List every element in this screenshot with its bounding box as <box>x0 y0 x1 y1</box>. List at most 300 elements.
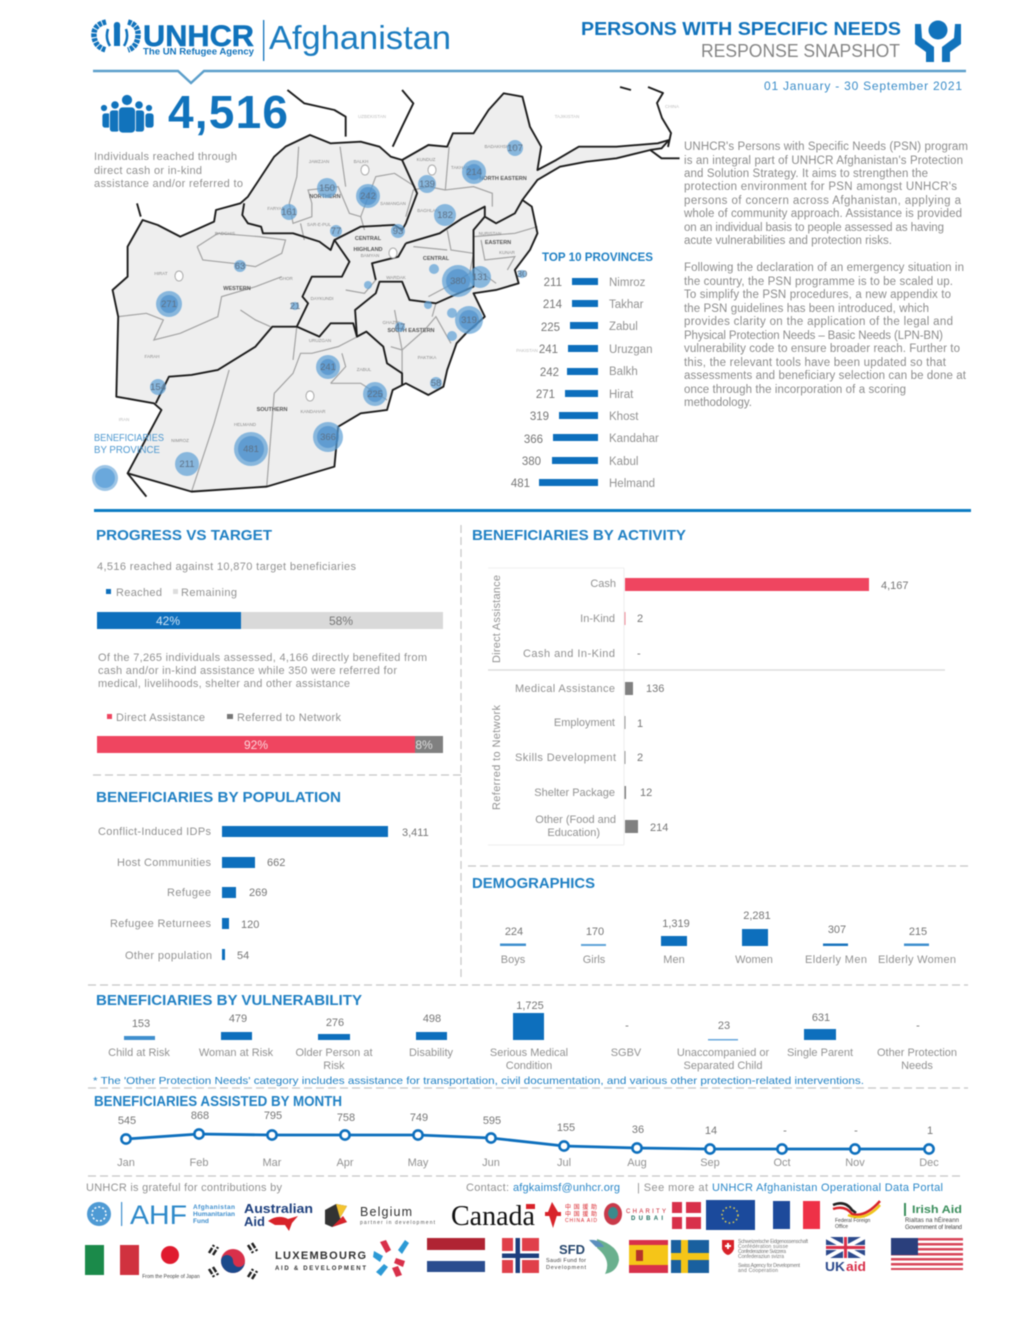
logo: Switzerland: Confédération suisse <box>738 1244 788 1250</box>
bar chart: population groups <box>98 826 429 962</box>
map: proportional circles: 107 <box>507 143 523 154</box>
header: report title: RESPONSE SNAPSHOT <box>701 41 900 61</box>
bar chart: vulnerability groups: Woman at Risk <box>199 1047 274 1059</box>
panel: top 10 provinces: 380 <box>522 456 541 468</box>
map: proportional circles: 154 <box>150 382 166 393</box>
logo: UN emblem and AHF: Humanitarian <box>193 1211 235 1218</box>
progress bar: direct vs referred: 92% <box>244 738 268 752</box>
bar chart: demographic groups: Women <box>735 954 773 966</box>
map: proportional circles: 21 <box>290 301 300 312</box>
map: neighbouring borders: TAJIKISTAN <box>555 114 579 119</box>
bar chart: activities: Skills Development <box>515 752 616 764</box>
bar chart: activities: Education) <box>547 827 600 839</box>
panel: top 10 provinces: 242 <box>540 367 559 379</box>
bar chart: vulnerability groups: Separated Child <box>684 1060 762 1072</box>
bar chart: activities: In-Kind <box>580 613 615 625</box>
map: province and region labels: DAYKUNDI <box>311 296 333 301</box>
panel: top 10 provinces: 366 <box>524 434 543 446</box>
logo: China aid: 中国援助 <box>565 1210 597 1218</box>
bar chart: vulnerability groups: Needs <box>901 1060 933 1072</box>
logo: Dubai Cares style charity: DUBAI <box>631 1216 663 1222</box>
logo: Irish Aid: Rialtas na hÉireann <box>905 1217 959 1224</box>
logo: Irish Aid: Irish Aid <box>912 1204 962 1216</box>
bar chart: population groups: Host Communities <box>117 857 212 869</box>
legend: reached and remaining: Reached <box>116 587 162 599</box>
heading: by month: BENEFICIARIES ASSISTED BY MONTH <box>94 1093 342 1110</box>
line chart: monthly beneficiaries: Dec <box>919 1157 939 1169</box>
logo: UK aid: aid <box>846 1260 866 1274</box>
panel: top 10 provinces: 481 <box>511 478 530 490</box>
map: province and region labels: BAGHLAN <box>417 208 439 213</box>
progress bar: reached vs remaining: 42% <box>156 614 180 628</box>
bar chart: population groups: 54 <box>237 950 249 962</box>
line chart: monthly beneficiaries: 36 <box>632 1124 644 1136</box>
text block: programme description: the PSN guidelines has been introduced, which <box>684 303 929 315</box>
text block: programme description: is an integral part of UNHCR Afghanistan's Protection <box>684 155 963 167</box>
bar chart: activities: Cash <box>590 578 616 590</box>
logo: Germany: Federal Foreign <box>835 1218 871 1224</box>
bar chart: activities: 1 <box>637 718 643 730</box>
map: proportional circles: 182 <box>437 210 453 221</box>
text block: programme description: persons of concern across Afghanistan, applying a <box>684 195 962 207</box>
legend: reached and remaining <box>106 587 237 599</box>
map: province and region labels: PAKTIKA <box>418 355 436 360</box>
map: proportional circles: 319 <box>461 315 477 326</box>
line chart: monthly beneficiaries: 155 <box>557 1122 575 1134</box>
line chart: monthly beneficiaries: Nov <box>845 1157 865 1169</box>
bar chart: population groups: 269 <box>249 887 267 899</box>
map: proportional circles <box>150 140 527 476</box>
bar chart: population groups: Conflict-Induced IDPs <box>98 826 212 838</box>
bar chart: activities: 2 <box>637 752 643 764</box>
bar chart: activities: Employment <box>554 717 615 729</box>
bar chart: vulnerability groups: 631 <box>812 1012 830 1024</box>
panel: top 10 provinces: TOP 10 PROVINCES <box>542 252 653 264</box>
panel: top 10 provinces: 225 <box>541 322 560 334</box>
bar chart: demographic groups: Boys <box>501 954 526 966</box>
icon: hands holding person <box>915 20 961 62</box>
bar chart: demographic groups: Elderly Women <box>878 954 956 966</box>
text block: programme description: assessments and beneficiary selection can be done at <box>684 370 967 382</box>
panel: top 10 provinces: 214 <box>543 299 563 311</box>
flag: Sweden <box>671 1240 709 1273</box>
bar chart: demographic groups: 224 <box>505 926 523 938</box>
line chart: monthly beneficiaries: Feb <box>190 1157 208 1169</box>
panel: top 10 provinces: Zabul <box>609 321 638 333</box>
map: proportional circles: 63 <box>235 261 245 272</box>
text block: programme description: To simplify the PSN procedures, a new appendix to <box>684 289 951 301</box>
heading: by activity: BENEFICIARIES BY ACTIVITY <box>472 527 686 544</box>
logo: Switzerland <box>722 1239 809 1274</box>
header rule with notch <box>93 71 966 83</box>
text: assessment summary: Of the 7,265 individuals assessed, 4,166 directly benefited from <box>98 652 427 664</box>
map: province and region labels: SAR-E-PUL <box>307 222 331 227</box>
bar chart: vulnerability groups: - <box>625 1020 629 1032</box>
map: province and region labels: GHAZNI <box>382 320 400 325</box>
map: province and region labels: SOUTHERN <box>257 407 287 413</box>
line chart: monthly beneficiaries: Apr <box>336 1157 354 1169</box>
map: province and region labels: WESTERN <box>223 286 251 292</box>
big number: 4,516 <box>168 86 288 138</box>
headline: people reached <box>94 86 288 190</box>
bar chart: vulnerability groups: 1,725 <box>516 1000 544 1012</box>
map: province and region labels: CENTRAL <box>423 256 450 262</box>
bar chart: vulnerability groups: Risk <box>323 1060 345 1072</box>
map: province and region labels: BADAKHSHAN <box>484 144 516 149</box>
logo: Switzerland: and Cooperation <box>738 1268 778 1274</box>
line chart: monthly beneficiaries: 1 <box>927 1125 933 1137</box>
panel: beneficiaries by activity <box>472 527 945 845</box>
bar chart: activities: Direct Assistance <box>491 575 503 663</box>
map: proportional circles: 77 <box>331 226 341 237</box>
bar chart: vulnerability groups: 498 <box>423 1013 441 1025</box>
text block: programme description: this, the relevant tools have been updated so that <box>684 357 947 369</box>
bar chart: vulnerability groups: - <box>916 1020 920 1032</box>
icon: UNHCR emblem <box>94 22 138 50</box>
line chart: monthly beneficiaries: Jul <box>557 1157 571 1169</box>
map: proportional circles: 211 <box>179 459 195 470</box>
bar chart: demographic groups <box>500 910 956 966</box>
map: province and region labels: FARAH <box>144 354 160 359</box>
bar chart: vulnerability groups: Single Parent <box>787 1047 853 1059</box>
line chart: monthly beneficiaries: 545 <box>118 1115 136 1127</box>
logo: Dubai Cares style charity <box>604 1203 666 1225</box>
map: province and region labels: NURISTAN <box>479 231 501 236</box>
line chart: monthly beneficiaries <box>117 1110 939 1169</box>
bar chart: demographic groups: 215 <box>909 926 927 938</box>
bar chart: population groups: Other population <box>125 950 212 962</box>
legend: direct vs referred: Direct Assistance <box>116 712 205 724</box>
line chart: monthly beneficiaries: 795 <box>264 1110 282 1122</box>
map: province and region labels: KUNAR <box>499 250 516 255</box>
map: proportional circles: 241 <box>320 362 336 373</box>
panel: top 10 provinces <box>511 252 659 490</box>
heading: by population: BENEFICIARIES BY POPULATION <box>96 789 341 806</box>
logo: Belgium <box>325 1204 436 1227</box>
map legend: BY PROVINCE <box>94 445 160 456</box>
flag: France <box>773 1201 820 1229</box>
logo: Germany <box>833 1201 880 1230</box>
logo: Dubai Cares style charity: CHARITY <box>626 1209 666 1215</box>
progress bar: direct vs referred: 8% <box>415 738 433 752</box>
panel: top 10 provinces: Khost <box>609 411 639 423</box>
bar chart: vulnerability groups: Serious Medical <box>490 1047 568 1059</box>
map: province and region labels: HIRAT <box>154 271 168 276</box>
panel: top 10 provinces: 319 <box>530 411 549 423</box>
bar chart: demographic groups: Girls <box>583 954 606 966</box>
map: proportional circles: 242 <box>360 191 376 202</box>
line chart: monthly beneficiaries: 749 <box>410 1112 428 1124</box>
bar chart: demographic groups: 2,281 <box>743 910 771 922</box>
map: proportional circles: 161 <box>281 207 297 218</box>
map: proportional circles: 366 <box>320 432 336 443</box>
logo: Luxembourg <box>275 1240 409 1277</box>
text: assessment summary <box>98 652 427 690</box>
panel: top 10 provinces: Kandahar <box>609 433 659 445</box>
bar chart: activities: 4,167 <box>881 580 909 592</box>
map: province and region labels: HELMAND <box>234 422 257 427</box>
bar chart: activities: - <box>637 648 641 660</box>
map: province and region labels: URUZGAN <box>309 338 331 343</box>
text block: programme description: whole of community approach. Assistance is provided <box>683 208 962 220</box>
panel: progress vs target <box>96 527 443 753</box>
donor logos <box>85 1200 963 1280</box>
text block: programme description: once through the incorporation of a scoring <box>684 384 906 396</box>
map: proportional circles: 214 <box>466 167 482 178</box>
map: proportional circles: 139 <box>419 179 435 190</box>
panel: top 10 provinces: Balkh <box>609 366 638 378</box>
map: province and region labels: NORTHERN <box>309 194 341 200</box>
map: province and region labels: TAKHAR <box>451 165 470 170</box>
bar chart: vulnerability groups: 23 <box>718 1020 730 1032</box>
line chart: monthly beneficiaries: - <box>854 1125 858 1137</box>
bar chart: population groups: 120 <box>241 919 259 931</box>
text block: programme description: UNHCR's Persons with Specific Needs (PSN) program <box>684 141 968 153</box>
logo: Irish Aid <box>905 1203 962 1231</box>
text block: programme description: acute vulnerabilities and protection risks. <box>684 235 892 247</box>
bar chart: activities: 2 <box>637 613 643 625</box>
map: proportional circles: 481 <box>243 444 259 455</box>
footnote: * The 'Other Protection Needs' category includes assistance for transportation, civil documentation, and various other protection-related interventions. <box>93 1075 864 1087</box>
bar chart: population groups: Refugee Returnees <box>110 918 212 930</box>
map: Afghanistan outline and regions <box>113 93 669 492</box>
map: province and region labels: WARDAK <box>386 275 406 280</box>
logo: China aid: 中国援助 <box>565 1203 597 1211</box>
logo: SFD: Development <box>546 1265 586 1271</box>
line chart: monthly beneficiaries: Jun <box>482 1157 500 1169</box>
map: province and region labels: SOUTH EASTERN <box>387 328 435 334</box>
panel: top 10 provinces: 241 <box>539 344 558 356</box>
map: neighbouring borders: UZBEKISTAN <box>358 114 386 119</box>
map: province and region labels: SAMANGAN <box>380 201 406 206</box>
description: direct cash or in-kind <box>94 165 202 177</box>
map: province and region labels: KANDAHAR <box>300 409 326 414</box>
map: proportional circles: 47 <box>395 322 405 333</box>
map: proportional circles: 271 <box>161 299 177 310</box>
panel: top 10 provinces: Hirat <box>609 389 634 401</box>
flag: Denmark <box>672 1202 701 1229</box>
map: city markers <box>175 165 436 401</box>
logo: UN emblem and AHF: AHF <box>130 1200 187 1230</box>
line chart: monthly beneficiaries: 758 <box>337 1112 355 1124</box>
map: province and region labels: CENTRAL <box>355 236 382 242</box>
text block: programme description <box>683 141 968 409</box>
line chart: monthly beneficiaries: 14 <box>705 1125 717 1137</box>
logo: Germany: Office <box>835 1224 848 1230</box>
bar chart: activities <box>488 568 945 845</box>
progress bar: reached vs remaining: 58% <box>329 614 353 628</box>
text: target summary: 4,516 reached against 10,870 target beneficiaries <box>97 561 356 573</box>
panel: top 10 provinces: Uruzgan <box>609 344 652 356</box>
map: province and region labels: JAWZJAN <box>309 159 329 164</box>
flag: South Korea <box>209 1243 257 1279</box>
panel: top 10 provinces: Nimroz <box>609 277 646 289</box>
map: province and region labels: GHOR <box>279 276 294 281</box>
map: province and region labels: NORTH EASTERN <box>479 176 527 182</box>
bar chart: vulnerability groups: Other Protection <box>877 1047 957 1059</box>
text block: programme description: and Solution Strategy. It aims to strengthen the <box>684 168 928 180</box>
text block: programme description: methodology. <box>684 397 752 409</box>
bar chart: vulnerability groups: Unaccompanied or <box>677 1047 769 1059</box>
flag: Norway <box>502 1238 539 1273</box>
map: province and region labels: KUNDUZ <box>417 157 436 162</box>
logo: Switzerland: Confederaziun svizra <box>738 1254 784 1260</box>
description: Individuals reached through <box>94 151 237 163</box>
footer: contributions and contact: UNHCR is grateful for contributions by <box>86 1182 282 1194</box>
map: province and region labels: ZABUL <box>357 367 372 372</box>
panel: beneficiaries by vulnerability <box>93 992 957 1087</box>
panel: beneficiaries by month <box>94 1093 939 1169</box>
bar chart: vulnerability groups: Child at Risk <box>108 1047 170 1059</box>
map: neighbouring borders: CHINA <box>665 104 679 109</box>
bar chart: vulnerability groups: Older Person at <box>295 1047 373 1059</box>
text: UNHCR wordmark: UNHCR <box>143 20 254 53</box>
bar chart: population groups: 3,411 <box>402 827 429 839</box>
logo: Switzerland: Schweizerische Eidgenossenschaft <box>738 1239 809 1245</box>
date range: 01 January - 30 September 2021 <box>764 79 962 93</box>
text block: programme description: provides clarity on the application of the legal and <box>684 316 953 328</box>
bar chart: demographic groups: 307 <box>828 924 846 936</box>
line chart: monthly beneficiaries: May <box>408 1157 429 1169</box>
logo: Japan <box>142 1246 200 1280</box>
legend: reached and remaining: Remaining <box>181 587 237 599</box>
progress bar: direct vs referred <box>97 736 443 753</box>
header: UNHCR logo <box>94 20 254 56</box>
logo: Canada: Canada <box>451 1201 536 1232</box>
map: proportional circles: 225 <box>367 389 383 400</box>
header: report title <box>581 18 901 61</box>
map: proportional circles: 131 <box>472 272 488 283</box>
map: neighbouring borders: IRAN <box>119 417 129 422</box>
panel: demographics <box>472 875 956 966</box>
footer: contributions and contact <box>86 1182 943 1194</box>
bar chart: activities: Cash and In-Kind <box>523 648 615 660</box>
line chart: monthly beneficiaries: Sep <box>700 1157 720 1169</box>
bar chart: vulnerability groups: Disability <box>409 1047 454 1059</box>
logo: Belgium: Belgium <box>360 1205 412 1219</box>
description: assistance and/or referred to <box>94 178 243 190</box>
text block: programme description: protection environment for PSN amongst UNHCR's <box>684 181 957 193</box>
flag: European Union <box>706 1200 755 1230</box>
text block: programme description: the country, the PSN programme is to be scaled up. <box>684 276 953 288</box>
bar chart: vulnerability groups: SGBV <box>611 1047 642 1059</box>
logo: Australian Aid: Australian <box>244 1201 313 1216</box>
logo: UN emblem and AHF <box>87 1200 235 1230</box>
logo: UK aid <box>825 1237 866 1274</box>
logo: Switzerland: Confederazione Svizzera <box>738 1249 786 1255</box>
panel: top 10 provinces: Kabul <box>609 456 638 468</box>
logo: Japan: From the People of Japan <box>142 1274 200 1280</box>
flag: United States <box>891 1238 963 1270</box>
text: assessment summary: medical, livelihoods, shelter and other assistance <box>98 678 350 690</box>
panel: top 10 provinces: 211 <box>544 277 562 289</box>
bar chart: vulnerability groups: Condition <box>506 1060 552 1072</box>
text: assessment summary: cash and/or in-kind assistance while 350 were referred for <box>98 665 397 677</box>
map: proportional circles: 58 <box>431 378 441 389</box>
icon: group of people <box>100 94 154 133</box>
panel: top 10 provinces: Helmand <box>609 478 655 490</box>
heading: demographics: DEMOGRAPHICS <box>472 875 595 892</box>
description <box>94 151 243 190</box>
text block: programme description: Physical Protection Needs – Basic Needs (LPN-BN) <box>684 330 943 342</box>
map: province and region labels: BADGHIS <box>215 231 235 236</box>
header: country name: Afghanistan <box>269 19 451 56</box>
logo: UK aid: UK <box>825 1260 845 1274</box>
panel: beneficiaries by population <box>96 789 429 962</box>
bar chart: demographic groups: 170 <box>586 926 604 938</box>
logo: Switzerland: Swiss Agency for Development <box>738 1263 801 1269</box>
flag: Italy <box>85 1245 139 1275</box>
logo: Luxembourg: LUXEMBOURG <box>275 1250 366 1262</box>
bar chart: vulnerability groups: 276 <box>326 1017 344 1029</box>
progress bar: reached vs remaining <box>97 612 443 629</box>
text: agency tagline: The UN Refugee Agency <box>143 46 254 56</box>
bar chart: activities: 136 <box>646 683 664 695</box>
logo: China aid <box>545 1202 597 1228</box>
map legend <box>92 433 164 491</box>
section rule <box>94 509 971 512</box>
map: beneficiaries by province <box>92 87 680 497</box>
bar chart: population groups: Refugee <box>167 887 211 899</box>
bar chart: demographic groups: Elderly Men <box>805 954 867 966</box>
logo: SFD <box>546 1239 619 1274</box>
line chart: monthly beneficiaries: 868 <box>191 1110 209 1122</box>
text block: programme description: on an individual basis to people assessed as having <box>684 222 944 234</box>
map: proportional circles: 150 <box>319 183 335 194</box>
bar chart: activities: 214 <box>650 822 668 834</box>
bar chart: demographic groups: 1,319 <box>662 918 690 930</box>
footer: contributions and contact: | See more at <box>637 1182 708 1194</box>
legend: direct vs referred: Referred to Network <box>237 712 342 724</box>
bar chart: activities: Shelter Package <box>534 787 615 799</box>
map legend: BENEFICIARIES <box>94 433 164 444</box>
logo: Belgium: partner in development <box>360 1220 436 1226</box>
map: proportional circles: 380 <box>450 276 466 287</box>
logo: UN emblem and AHF: Afghanistan <box>193 1204 235 1211</box>
map: neighbouring borders <box>119 87 680 497</box>
map: province and region labels: BALKH <box>354 159 368 164</box>
panel: top 10 provinces: Takhar <box>609 299 644 311</box>
footer: contributions and contact: UNHCR Afghanistan Operational Data Portal <box>712 1182 943 1194</box>
bar chart: activities: 12 <box>640 787 652 799</box>
logo: China aid: CHINA AID <box>565 1218 597 1224</box>
line chart: monthly beneficiaries: Jan <box>117 1157 135 1169</box>
bar chart: vulnerability groups: 153 <box>132 1018 150 1030</box>
header: report title: PERSONS WITH SPECIFIC NEEDS <box>581 18 901 39</box>
map: province and region labels: HIGHLAND <box>353 247 383 253</box>
map: proportional circles: 93 <box>393 226 403 237</box>
bar chart: vulnerability groups <box>108 1000 957 1072</box>
logo: Australian Aid <box>244 1201 313 1231</box>
flag: Spain <box>629 1240 668 1273</box>
bar chart: vulnerability groups: 479 <box>229 1013 247 1025</box>
logo: Luxembourg: AID & DEVELOPMENT <box>275 1266 366 1272</box>
map: province and region labels: EASTERN <box>485 240 511 246</box>
bar chart: population groups: 662 <box>267 857 285 869</box>
map: province and region labels <box>144 144 527 443</box>
flag: Netherlands <box>427 1238 485 1272</box>
map: neighbouring borders: PAKISTAN <box>516 348 538 353</box>
bar chart: demographic groups: Men <box>663 954 685 966</box>
bar chart: activities: Referred to Network <box>491 704 503 810</box>
logo: Australian Aid: Aid <box>244 1214 265 1229</box>
logo: UN emblem and AHF: Fund <box>193 1218 209 1225</box>
legend: direct vs referred <box>107 712 342 724</box>
heading: progress vs target: PROGRESS VS TARGET <box>96 527 272 544</box>
line chart: monthly beneficiaries: Oct <box>773 1157 791 1169</box>
logo: SFD: Saudi Fund for <box>546 1258 586 1264</box>
map: province and region labels: BAMYAN <box>361 253 379 258</box>
